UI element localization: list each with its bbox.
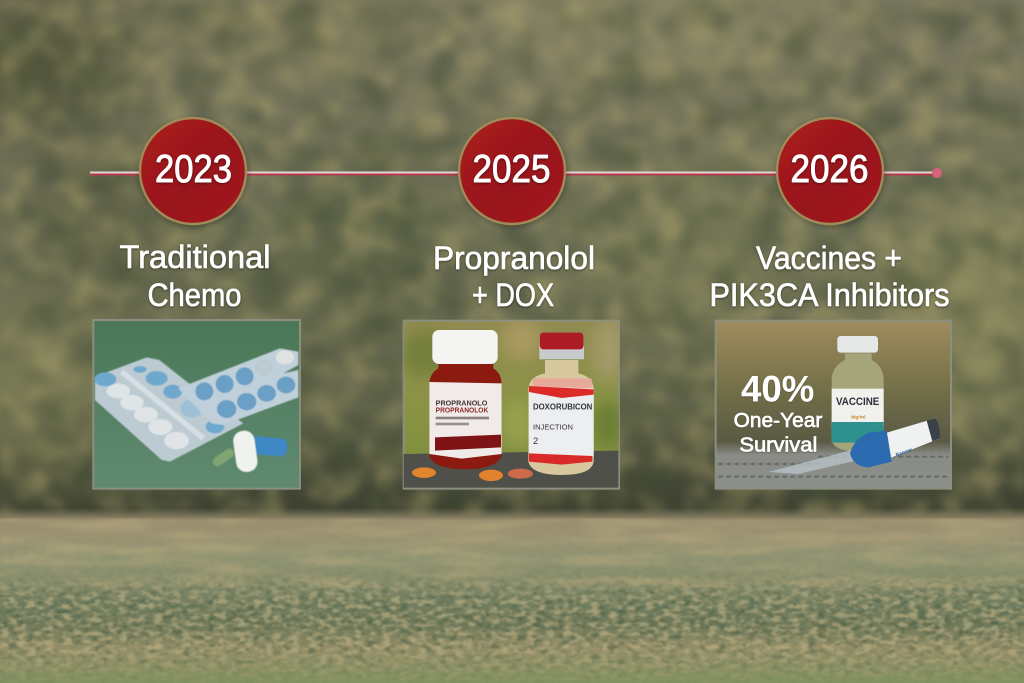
blister pack: lower: [94, 357, 243, 462]
milestone: 2025: [459, 118, 565, 224]
heading: Traditional Chemo: Traditional: [120, 239, 270, 275]
syringe: [768, 418, 940, 474]
heading: Vaccines + PIK3CA Inhibitors: Vaccines +: [756, 240, 902, 276]
blurred backdrop: [402, 320, 625, 447]
heading: Traditional Chemo: Chemo: [148, 277, 242, 313]
callout: 40% one-year survival: One-Year: [734, 410, 823, 432]
grass foreground: [0, 508, 1024, 683]
heading: Vaccines + PIK3CA Inhibitors: PIK3CA Inhibitors: [710, 277, 950, 313]
vaccine vial: Mg/ml: [851, 414, 866, 420]
heading: Propranolol + DOX: + DOX: [472, 277, 554, 313]
propranolol bottle: PROPRANOLOK: [436, 406, 489, 415]
image panel: blister packs and pills: [93, 320, 300, 489]
loose capsules: [211, 429, 288, 473]
syringe: Banner: [895, 447, 913, 459]
milestone: 2026: 2026: [790, 148, 868, 191]
propranolol bottle: [429, 330, 502, 469]
doxorubicin vial: [528, 333, 594, 475]
callout: 40% one-year survival: 40%: [741, 369, 814, 410]
image panel: vaccine vial and syringe: [716, 321, 951, 489]
image panel: propranolol and doxorubicin bottles: [402, 320, 625, 489]
doxorubicin vial: DOXORUBICON: [533, 401, 592, 411]
orange tablets: [412, 467, 533, 481]
stone surface: [404, 451, 618, 488]
milestone: 2026: [777, 118, 883, 224]
callout: 40% one-year survival: [734, 369, 823, 457]
table texture: [718, 457, 948, 477]
milestone: 2025: 2025: [472, 148, 550, 191]
doxorubicin vial: INJECTION: [533, 422, 573, 431]
blister pack: upper: [178, 348, 298, 425]
heading: Propranolol + DOX: [433, 240, 595, 313]
heading: Propranolol + DOX: Propranolol: [433, 240, 595, 276]
vaccine vial: [832, 336, 884, 452]
timeline end dot: [932, 168, 942, 178]
callout: 40% one-year survival: Survival: [739, 435, 817, 457]
vaccine vial: VACCINE: [836, 396, 879, 408]
heading: Vaccines + PIK3CA Inhibitors: [710, 240, 950, 313]
propranolol bottle: PROPRANOLO: [436, 398, 488, 407]
timeline line: [90, 168, 942, 178]
heading: Traditional Chemo: [120, 239, 270, 313]
milestone: 2023: [140, 118, 246, 224]
doxorubicin vial: 2: [533, 436, 538, 446]
milestone: 2023: 2023: [155, 148, 232, 191]
